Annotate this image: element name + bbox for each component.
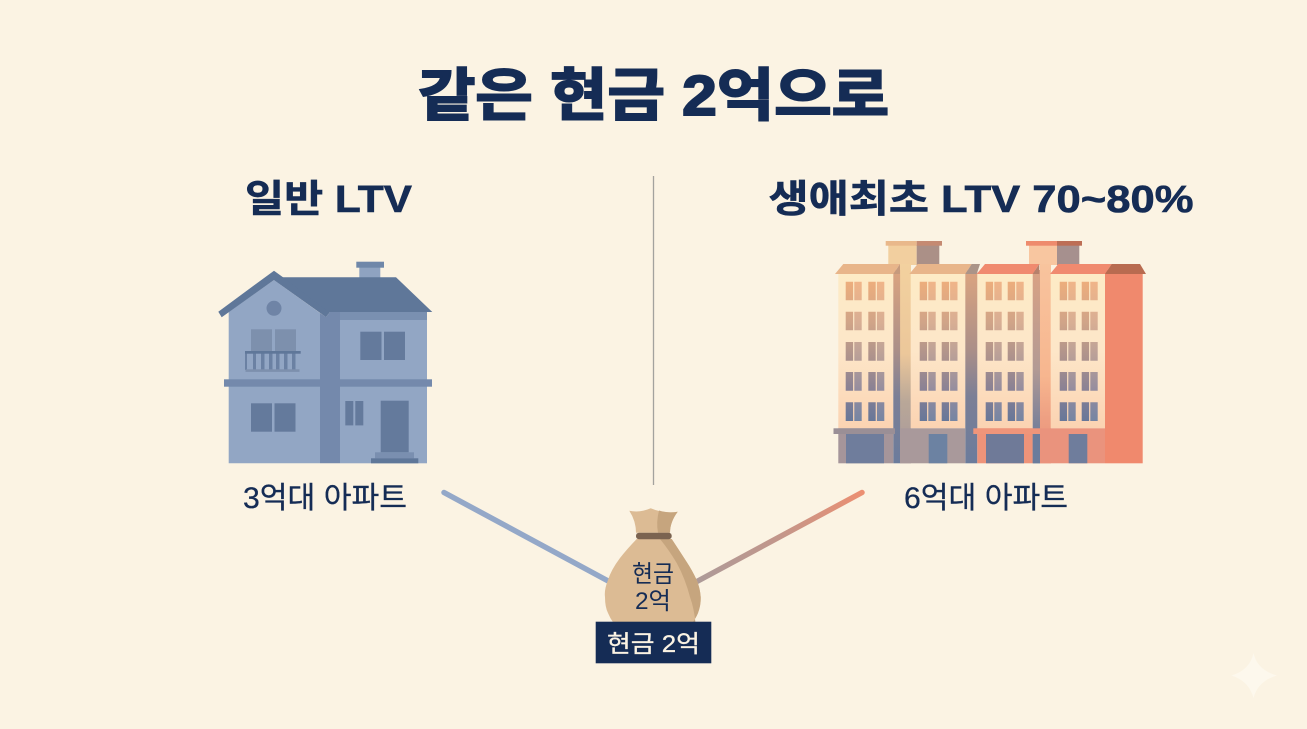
arrow: right connector: [696, 492, 862, 582]
icon: apartment building: [834, 241, 1146, 463]
icon: sparkle: [1232, 653, 1277, 698]
windows: [846, 280, 1098, 422]
roofs: [835, 264, 900, 274]
ground floors: [838, 428, 893, 463]
heading: first-time LTV: 생애최초 LTV 70~80%: [768, 179, 1194, 221]
center divider: [652, 176, 654, 485]
tower fronts: [838, 274, 893, 428]
title: 같은 현금 2억으로: [418, 64, 889, 128]
callout: cash label: [596, 622, 711, 663]
tower sides: [893, 270, 900, 463]
arrow: left connector: [444, 492, 610, 582]
balcony: [245, 329, 301, 372]
callout: cash label: 현금 2억: [607, 631, 700, 658]
icon: money bag: [605, 508, 701, 623]
bag text: 현금: [632, 561, 674, 588]
label: 3억대 아파트: 3억대 아파트: [243, 482, 407, 515]
label: 6억대 아파트: 6억대 아파트: [904, 482, 1068, 515]
bag text: [632, 561, 674, 615]
heading: general LTV: 일반 LTV: [245, 179, 413, 221]
icon: house: [218, 262, 432, 463]
bag text: 2억: [635, 588, 671, 615]
